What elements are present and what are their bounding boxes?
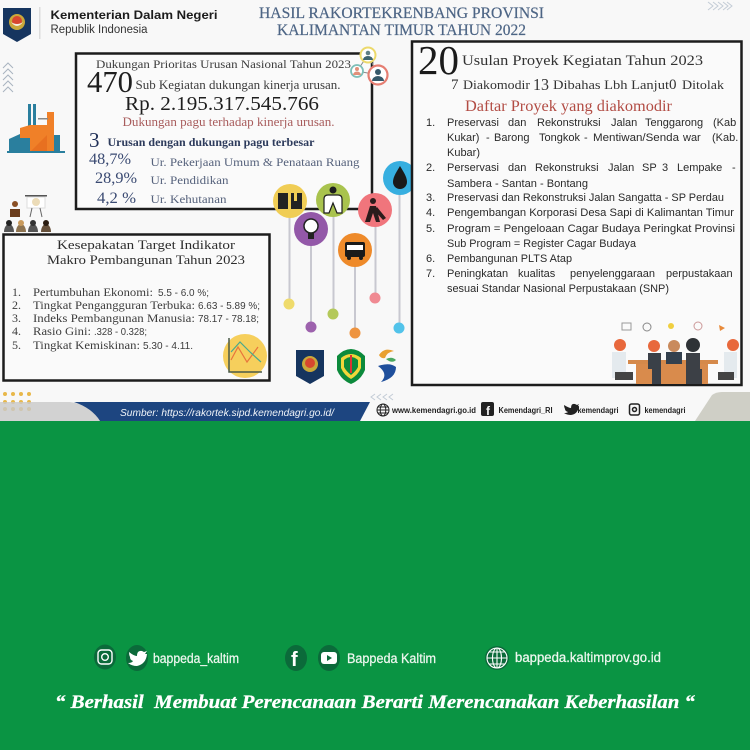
status counts: Diakomodir bbox=[463, 77, 531, 92]
status counts: Ditolak bbox=[682, 77, 725, 92]
channel text: Bappeda Kaltim bbox=[347, 651, 436, 666]
project list: SP bbox=[642, 162, 657, 174]
project list: Rekonstruksi bbox=[535, 162, 599, 174]
urusan list: Ur. Pendidikan bbox=[150, 173, 228, 187]
status counts: Dibahas Lbh Lanjut bbox=[553, 77, 669, 92]
footer social links: kemendagri bbox=[644, 406, 686, 415]
status counts: 0 bbox=[669, 77, 676, 93]
title: HASIL RAKORTEKRENBANG PROVINSI bbox=[259, 5, 544, 22]
title bbox=[259, 5, 544, 39]
icon: youtube bbox=[318, 645, 340, 671]
project list: Preservasi bbox=[447, 117, 499, 129]
project list: perpustakaan bbox=[666, 268, 733, 280]
project list: dan bbox=[508, 162, 526, 174]
indicator list: Tingkat Kemiskinan: bbox=[33, 338, 140, 352]
project list bbox=[426, 117, 738, 295]
urusan list bbox=[89, 151, 360, 207]
icon: twitter bbox=[126, 645, 148, 671]
pin: person in suit bbox=[316, 183, 350, 320]
urusan list: 4,2 % bbox=[97, 190, 136, 207]
logos row bbox=[296, 349, 396, 384]
chevrons near footer bbox=[371, 394, 393, 400]
urusan list: Ur. Pekerjaan Umum & Penataan Ruang bbox=[150, 155, 360, 169]
project list: sesuai Standar Nasional Perpustakaan (SNP) bbox=[447, 283, 669, 295]
icon: factory bbox=[7, 104, 65, 153]
handle text: bappeda_kaltim bbox=[153, 651, 239, 666]
project list: Perservasi bbox=[447, 162, 499, 174]
infographic pins: sectors bbox=[273, 161, 417, 338]
urusan list: 48,7% bbox=[89, 151, 131, 168]
social row: bappeda_kaltim bbox=[94, 644, 239, 671]
project list: - bbox=[486, 132, 490, 144]
usulan heading: Usulan Proyek Kegiatan Tahun 2023 bbox=[462, 53, 703, 69]
project list: kualitas bbox=[518, 268, 556, 280]
budget caption: Dukungan pagu terhadap kinerja urusan. bbox=[122, 115, 334, 129]
icon: presenter and audience bbox=[4, 195, 51, 232]
icon: facebook: f bbox=[486, 404, 491, 418]
project list: Pembangunan PLTS Atap bbox=[447, 253, 572, 265]
panel heading: Makro Pembangunan Tahun 2023 bbox=[47, 252, 245, 267]
pin: book bbox=[273, 184, 307, 310]
footer decor: dots bbox=[3, 392, 31, 411]
icon: meeting illustration bbox=[612, 322, 739, 384]
indicator list: Indeks Pembangunan Manusia: bbox=[33, 311, 195, 325]
project list: dan bbox=[508, 117, 526, 129]
project list: Preservasi dan Rekonstruksi Jalan Sangatta - SP Perdau bbox=[447, 192, 724, 204]
footer grey shape left bbox=[0, 402, 100, 421]
panel: kesepakatan target indikator bbox=[4, 234, 270, 380]
panel heading: Dukungan Prioritas Urusan Nasional Tahun 2023 bbox=[96, 57, 351, 71]
indicator list: 6.63 - 5.89 %; bbox=[198, 300, 260, 312]
logo: Bappenas bbox=[378, 350, 396, 382]
panel: usulan proyek bbox=[412, 37, 742, 385]
indicator list: 78.17 - 78.18; bbox=[198, 313, 259, 325]
indicator list: Tingkat Pengangguran Terbuka: bbox=[33, 298, 195, 312]
icon: facebook bbox=[285, 645, 307, 671]
footer grey shape right bbox=[695, 392, 750, 421]
header logo: Kementerian Dalam Negeri bbox=[3, 8, 31, 42]
project list: Pengembangan Korporasi Desa Sapi di Kalimantan Timur bbox=[447, 207, 734, 219]
big number 470: 470 bbox=[87, 64, 133, 99]
status counts bbox=[451, 75, 725, 94]
project list: Sambera - Santan - Bontang bbox=[447, 178, 588, 190]
social row: website bbox=[485, 646, 661, 670]
budget figure: Rp. 2.195.317.545.766 bbox=[125, 93, 319, 115]
project list: Sub Program = Register Cagar Budaya bbox=[447, 238, 637, 250]
project list: - bbox=[584, 132, 588, 144]
footer social links bbox=[377, 402, 686, 418]
logo: Kemendagri bbox=[296, 350, 324, 384]
project list: 4. bbox=[426, 207, 435, 219]
status counts: 13 bbox=[533, 75, 549, 94]
logo: Kalimantan Timur bbox=[337, 349, 365, 384]
project list: Tongkok bbox=[539, 132, 580, 144]
project list: Peningkatan bbox=[447, 268, 508, 280]
social row: Bappeda Kaltim bbox=[285, 645, 436, 671]
project list: Lempake bbox=[677, 162, 722, 174]
title: KALIMANTAN TIMUR TAHUN 2022 bbox=[277, 22, 526, 39]
urusan list: Ur. Kehutanan bbox=[150, 192, 226, 206]
icon: facebook bbox=[481, 402, 494, 418]
pin: oil drop bbox=[383, 161, 417, 334]
slogan: “ Berhasil Membuat Perencanaan Berarti Merencanakan Keberhasilan “ bbox=[55, 692, 696, 713]
pin: bus bbox=[338, 233, 372, 338]
project list: 6. bbox=[426, 253, 435, 265]
project list: 7. bbox=[426, 268, 435, 280]
indicator list: 5. bbox=[12, 338, 21, 352]
project list: (Kab bbox=[713, 117, 736, 129]
panel heading bbox=[47, 237, 245, 267]
project list: 3. bbox=[426, 192, 435, 204]
icon: chart bbox=[223, 334, 267, 378]
footer source bar: Sumber: https://rakortek.sipd.kemendagri.go.id/ bbox=[120, 407, 335, 419]
indicator list: 5.5 - 6.0 %; bbox=[158, 287, 209, 299]
project list: Kubar) bbox=[447, 147, 480, 159]
indicator list: 5.30 - 4.11. bbox=[143, 340, 193, 352]
indicator list: .328 - 0.328; bbox=[94, 326, 147, 338]
project list: 1. bbox=[426, 117, 435, 129]
project list: war bbox=[682, 132, 701, 144]
indicator list: 2. bbox=[12, 298, 21, 312]
footer social links: Kemendagri_RI bbox=[498, 406, 552, 415]
icon: instagram bbox=[630, 404, 640, 415]
footer source bar bbox=[74, 402, 370, 421]
number 3: 3 bbox=[89, 128, 100, 152]
big number 20: 20 bbox=[418, 37, 459, 83]
decorative chevrons top right bbox=[708, 2, 732, 10]
header organisation name: Kementerian Dalam Negeri bbox=[50, 8, 218, 22]
pin: road worker bbox=[358, 193, 392, 304]
urusan heading: Urusan dengan dukungan pagu terbesar bbox=[108, 137, 314, 149]
icon: instagram bbox=[94, 644, 116, 670]
project list: - bbox=[732, 162, 736, 174]
footer social links: kemendagri bbox=[578, 406, 618, 415]
header organisation name bbox=[39, 7, 218, 39]
project list: penyelenggaraan bbox=[570, 268, 655, 280]
indicator list: 1. bbox=[12, 285, 21, 299]
decorative chevrons left bbox=[3, 63, 13, 92]
urusan list: 28,9% bbox=[95, 170, 137, 187]
list heading: Daftar Proyek yang diakomodir bbox=[465, 98, 673, 115]
indicator list: 4. bbox=[12, 324, 21, 338]
project list: 3 bbox=[662, 162, 668, 174]
project list: Jalan bbox=[608, 162, 634, 174]
project list: (Kab. bbox=[712, 132, 738, 144]
icon: globe bbox=[485, 646, 509, 670]
status counts: 7 bbox=[451, 77, 459, 93]
project list: Jalan bbox=[611, 117, 637, 129]
website text: bappeda.kaltimprov.go.id bbox=[515, 650, 661, 665]
icon: people network bbox=[351, 48, 388, 84]
icon: facebook: f bbox=[291, 649, 298, 671]
project list: Rekonstruksi bbox=[537, 117, 601, 129]
project list: Kukar) bbox=[447, 132, 479, 144]
indicator list bbox=[12, 285, 260, 352]
indicator list: Rasio Gini: bbox=[33, 324, 91, 338]
project list: 5. bbox=[426, 223, 435, 235]
project list: Barong bbox=[494, 132, 529, 144]
panel heading: Kesepakatan Target Indikator bbox=[57, 237, 236, 252]
footer social links: www.kemendagri.go.id bbox=[391, 406, 476, 415]
indicator list: 3. bbox=[12, 311, 21, 325]
pin: light bulb bbox=[294, 212, 328, 332]
icon: globe bbox=[377, 404, 389, 416]
header organisation name: Republik Indonesia bbox=[50, 24, 148, 36]
icon: twitter bbox=[564, 404, 579, 415]
project list: 2. bbox=[426, 162, 435, 174]
indicator list: Pertumbuhan Ekonomi: bbox=[33, 285, 153, 299]
project list: Mentiwan/Senda bbox=[593, 132, 680, 144]
project list: Tenggarong bbox=[645, 117, 703, 129]
project list: Program = Pengeloaan Cagar Budaya Peringkat Provinsi bbox=[447, 223, 735, 235]
panel: dukungan prioritas bbox=[76, 54, 372, 209]
sub kegiatan text: Sub Kegiatan dukungan kinerja urusan. bbox=[136, 78, 340, 92]
